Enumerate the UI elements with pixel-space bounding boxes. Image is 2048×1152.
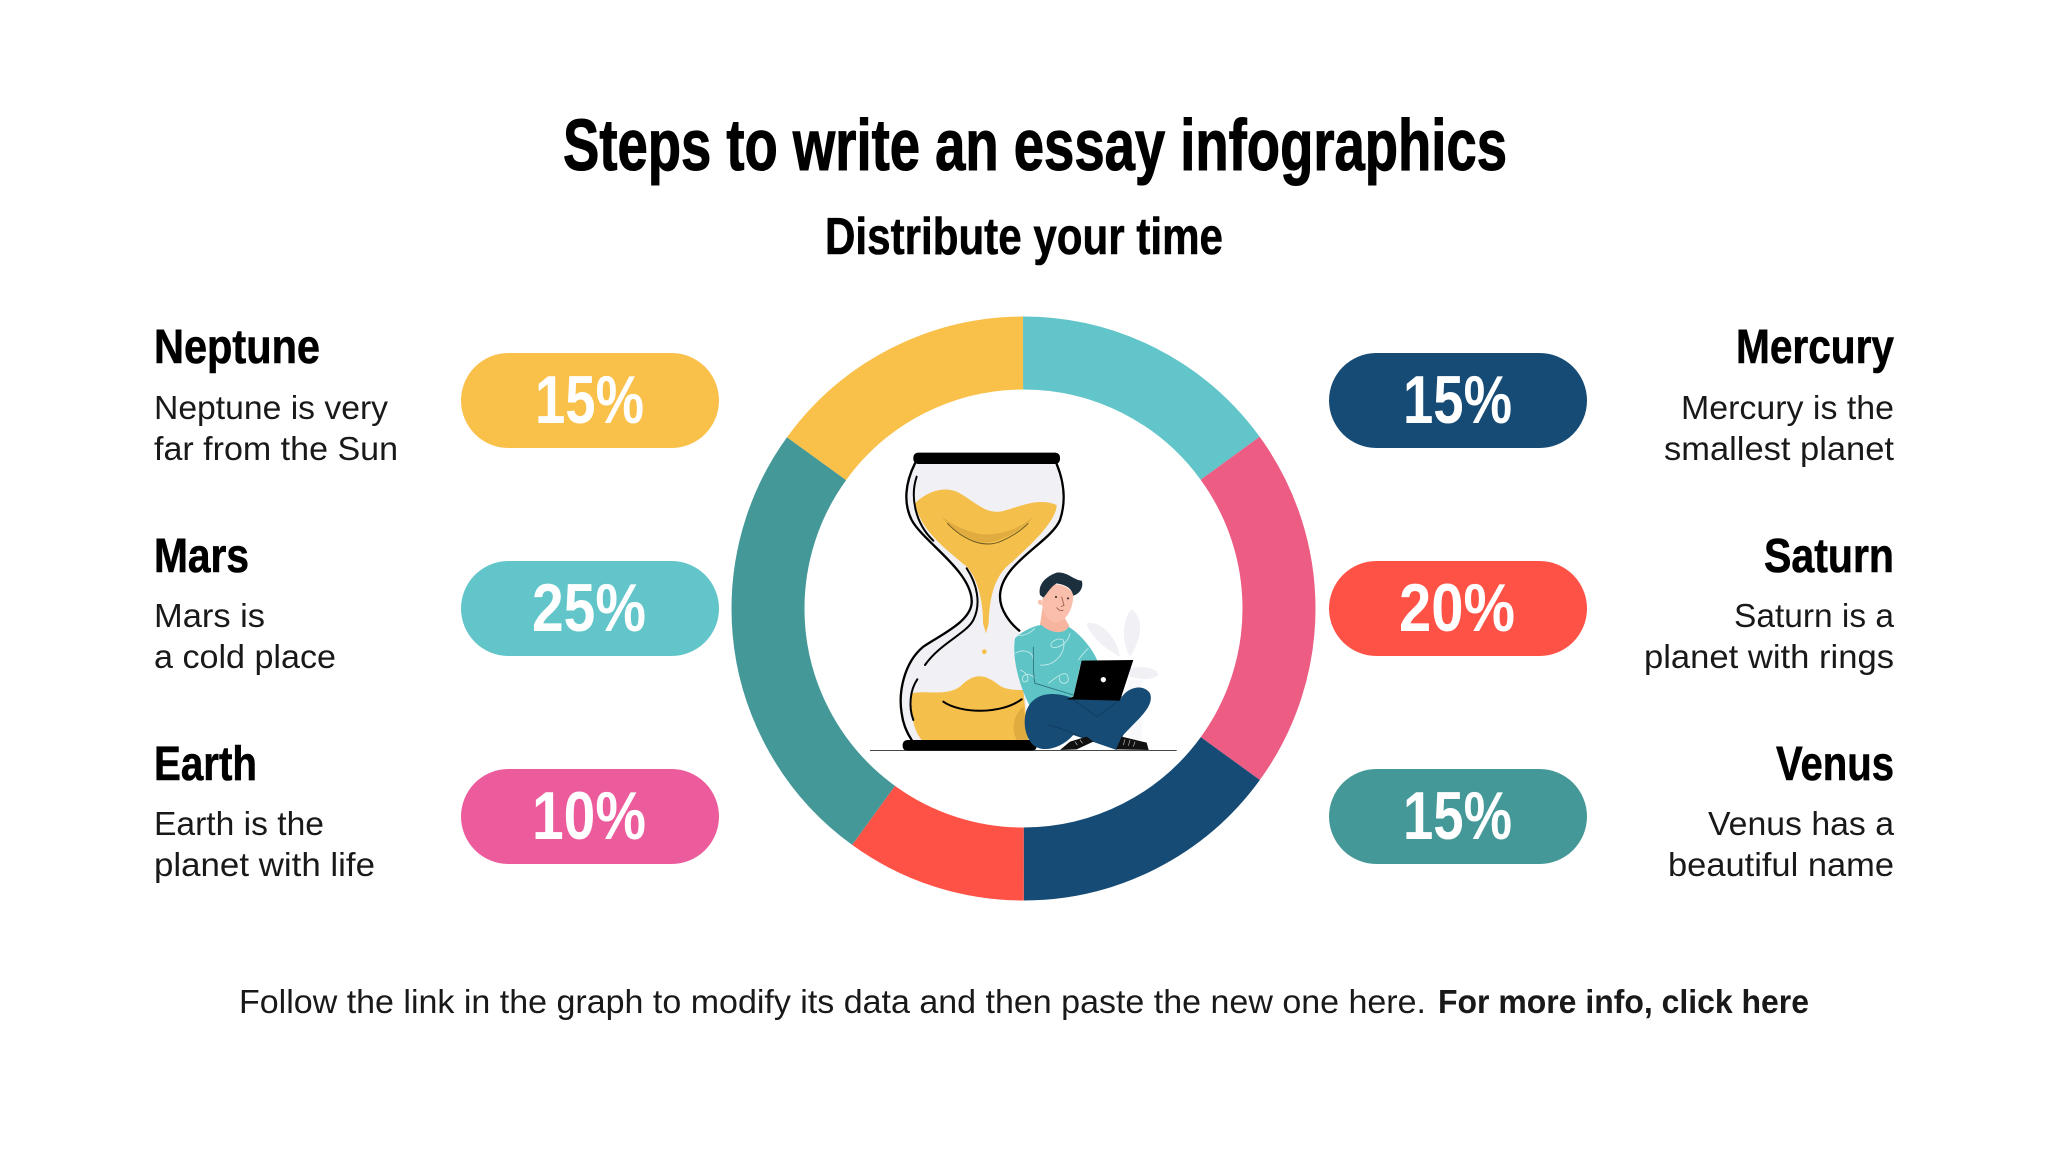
pill: 10% pink: 10% [532,778,646,854]
donut chart [768,353,1279,864]
pill: 20% red [1329,561,1587,656]
segment: Earth 10% red [768,353,1279,864]
pill: 15% navy: 15% [1403,362,1512,438]
text: Neptune description: Neptune is very [154,389,389,426]
text: Mars description: Mars is [154,597,265,634]
text: Neptune description: far from the Sun [154,430,398,467]
text: Mercury description: smallest planet [1664,430,1894,467]
icon: person with laptop [1014,572,1151,750]
panel: Earth [154,738,719,883]
title: Steps to write an essay infographics [563,106,1507,186]
pill: 15% navy [1329,353,1587,448]
segment: Mercury 15% teal [768,353,1279,864]
panel: Neptune [154,321,719,467]
pill: 15% yellow: 15% [535,362,644,438]
pill: 15% yellow [461,353,719,448]
segment: Saturn 20% pink [768,353,1279,864]
heading: Venus: Venus [1776,738,1894,791]
heading: Mars: Mars [154,530,249,583]
icon: hourglass [901,453,1064,751]
footer note: Follow the link in the graph to modify its data and then paste the new one here. [239,983,1426,1020]
text: Mars description [154,597,336,675]
pill: 20% red: 20% [1399,570,1515,646]
pill: 15% dark teal [1329,769,1587,864]
segment: Venus 15% navy [768,353,1279,864]
pill: 10% pink [461,769,719,864]
heading: Saturn: Saturn [1764,530,1894,583]
panel: Mercury [1329,321,1894,467]
footer note: For more info, click here [1438,983,1809,1020]
heading: Earth: Earth [154,738,257,791]
text: Venus description: beautiful name [1668,846,1894,883]
pill: 15% dark teal: 15% [1403,778,1512,854]
text: Venus description: Venus has a [1708,805,1895,842]
text: Earth description: Earth is the [154,805,324,842]
subtitle: Distribute your time [825,208,1223,266]
pill: 25% teal [461,561,719,656]
text: Mercury description [1664,389,1894,467]
segment: Mars 25% dark teal [768,353,1279,864]
icon: plant leaves [1087,609,1158,740]
text: Mercury description: Mercury is the [1681,389,1894,426]
panel: Venus [1329,738,1895,883]
text: Mars description: a cold place [154,638,336,675]
text: Neptune description [154,389,398,467]
text: Venus description [1668,805,1895,883]
heading: Mercury: Mercury [1736,321,1894,374]
ground line [870,749,1177,752]
text: Saturn description: planet with rings [1644,638,1894,675]
panel: Mars [154,530,719,675]
text: Earth description [154,805,375,883]
text: Earth description: planet with life [154,846,375,883]
text: Saturn description [1644,597,1895,675]
text: Saturn description: Saturn is a [1734,597,1895,634]
segment: Neptune 15% yellow [768,353,1279,864]
illustration: hourglass and person with laptop [870,453,1177,751]
heading: Neptune: Neptune [154,321,320,374]
pill: 25% teal: 25% [532,570,646,646]
panel: Saturn [1329,530,1895,675]
